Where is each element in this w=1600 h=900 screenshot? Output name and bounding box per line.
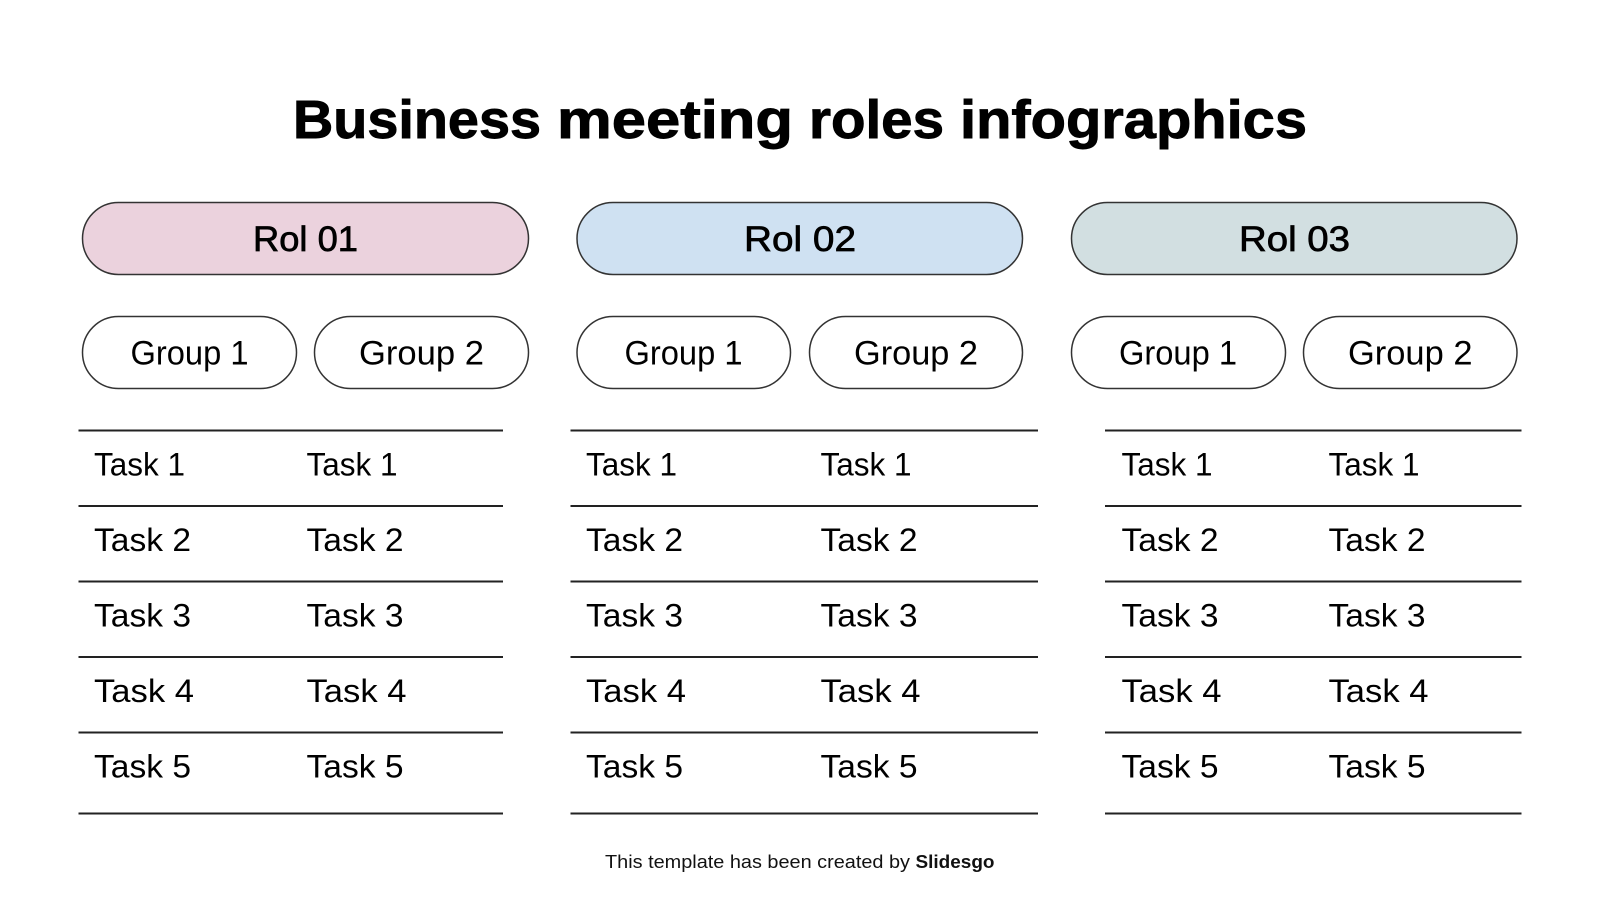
role 1 pill: Rol 01 [253, 220, 358, 259]
role 2 task table [570, 430, 1038, 814]
role 1 task table: Task 3 [306, 598, 404, 634]
title: infographics [960, 90, 1307, 150]
role 3 task table: Task 4 [1122, 673, 1222, 709]
role 1 group 2 pill: Group 2 [359, 334, 484, 372]
role 1 group 1 pill [82, 316, 296, 388]
role 2 task table: Task 2 [820, 522, 918, 558]
role 2 group 2 pill [810, 316, 1022, 388]
role 3 task table: Task 1 [1328, 446, 1420, 482]
role 2 group 1 pill: Group 1 [624, 334, 742, 372]
title: meeting [557, 90, 793, 150]
role 2 task table: Task 5 [586, 748, 683, 784]
role 2 task table: Task 4 [820, 673, 920, 709]
role 2 group 2 pill: Group 2 [854, 334, 978, 372]
role 3 task table: Task 3 [1122, 598, 1218, 634]
panel: role 2 [570, 202, 1038, 814]
title: roles [809, 90, 944, 150]
title: Business [293, 90, 541, 150]
role 3 pill [1072, 202, 1517, 274]
role 1 task table: Task 2 [94, 522, 191, 558]
role 1 task table: Task 3 [94, 598, 191, 634]
role 1 pill [82, 202, 528, 274]
role 3 task table: Task 1 [1122, 446, 1212, 482]
role 2 task table: Task 4 [586, 673, 686, 709]
role 3 task table [1105, 430, 1522, 814]
role 2 task table: Task 5 [820, 748, 918, 784]
role 3 task table: Task 5 [1122, 748, 1218, 784]
role 2 task table: Task 1 [820, 446, 912, 482]
role 1 task table: Task 4 [306, 673, 406, 709]
role 1 task table: Task 4 [94, 673, 194, 709]
role 1 task table: Task 2 [306, 522, 404, 558]
role 2 task table: Task 3 [820, 598, 918, 634]
role 3 group 2 pill [1304, 316, 1517, 388]
role 2 task table: Task 2 [586, 522, 683, 558]
panel: role 3 [1072, 202, 1522, 814]
role 1 group 1 pill: Group 1 [130, 334, 248, 372]
role 1 task table: Task 5 [306, 748, 404, 784]
role 3 task table: Task 3 [1328, 598, 1426, 634]
footer credit: Slidesgo [916, 851, 994, 872]
role 2 pill [577, 202, 1022, 274]
role 3 group 1 pill [1072, 316, 1286, 388]
role 3 task table: Task 5 [1328, 748, 1426, 784]
role 3 group 1 pill: Group 1 [1119, 334, 1237, 372]
role 1 group 2 pill [314, 316, 528, 388]
role 1 task table: Task 1 [306, 446, 398, 482]
footer credit: This template has been created by [605, 851, 911, 872]
role 2 group 1 pill [577, 316, 790, 388]
role 1 task table: Task 5 [94, 748, 191, 784]
panel: role 1 [78, 202, 528, 814]
role 2 task table: Task 3 [586, 598, 683, 634]
role 1 task table [78, 430, 503, 814]
role 3 task table: Task 2 [1328, 522, 1426, 558]
role 3 task table: Task 2 [1122, 522, 1218, 558]
role 3 pill: Rol 03 [1239, 220, 1350, 259]
role 2 task table: Task 1 [586, 446, 677, 482]
role 3 group 2 pill: Group 2 [1348, 334, 1472, 372]
role 2 pill: Rol 02 [744, 220, 856, 259]
role 3 task table: Task 4 [1328, 673, 1428, 709]
role 1 task table: Task 1 [94, 446, 185, 482]
